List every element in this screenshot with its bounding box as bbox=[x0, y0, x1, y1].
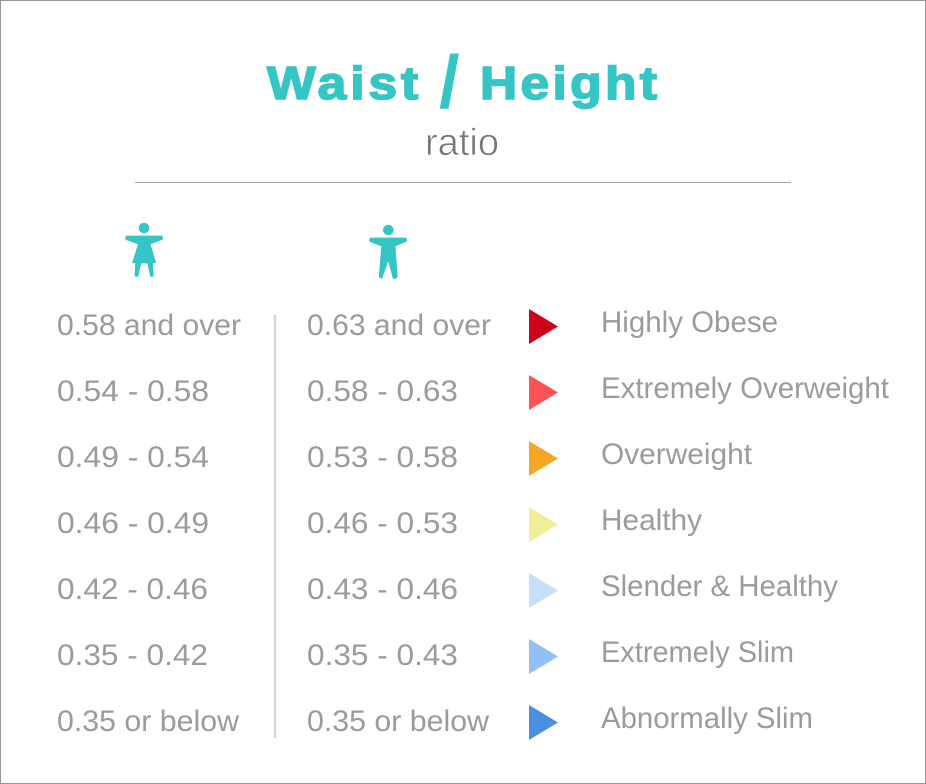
column: female ratios: 0.58 and over bbox=[57, 309, 241, 342]
category labels: Slender & Healthy bbox=[601, 570, 838, 603]
subtitle: ratio bbox=[425, 122, 499, 164]
column: male ratios: 0.43 - 0.46 bbox=[307, 573, 458, 606]
category labels bbox=[601, 306, 889, 735]
category labels: Healthy bbox=[601, 504, 702, 537]
category labels: Extremely Overweight bbox=[601, 372, 889, 405]
arrow: extremely overweight bbox=[529, 375, 558, 410]
column: male ratios: 0.35 or below bbox=[307, 705, 489, 738]
colour markers bbox=[529, 309, 558, 740]
column: male ratios bbox=[307, 309, 491, 738]
column: female ratios: 0.54 - 0.58 bbox=[57, 375, 209, 408]
column: female ratios: 0.35 or below bbox=[57, 705, 239, 738]
category labels: Overweight bbox=[601, 438, 752, 471]
arrow: extremely slim bbox=[529, 639, 558, 674]
title: Height bbox=[480, 58, 657, 109]
column: female ratios: 0.42 - 0.46 bbox=[57, 573, 208, 606]
arrow: healthy bbox=[529, 507, 558, 542]
column: male ratios: 0.58 - 0.63 bbox=[307, 375, 458, 408]
column: male ratios: 0.35 - 0.43 bbox=[307, 639, 458, 672]
column: female ratios bbox=[57, 309, 241, 738]
icon: male figure bbox=[370, 225, 406, 278]
column: male ratios: 0.46 - 0.53 bbox=[307, 507, 458, 540]
category labels: Extremely Slim bbox=[601, 636, 794, 669]
column: female ratios: 0.46 - 0.49 bbox=[57, 507, 209, 540]
arrow: abnormally slim bbox=[529, 705, 558, 740]
title: Waist bbox=[267, 58, 418, 109]
icon: female figure bbox=[126, 223, 162, 276]
title bbox=[267, 40, 657, 124]
column: male ratios: 0.63 and over bbox=[307, 309, 491, 342]
title: / bbox=[439, 40, 460, 124]
arrow: overweight bbox=[529, 441, 558, 476]
category labels: Highly Obese bbox=[601, 306, 778, 339]
arrow: highly obese bbox=[529, 309, 558, 344]
category labels: Abnormally Slim bbox=[601, 702, 813, 735]
column: female ratios: 0.35 - 0.42 bbox=[57, 639, 208, 672]
column: female ratios: 0.49 - 0.54 bbox=[57, 441, 209, 474]
column: male ratios: 0.53 - 0.58 bbox=[307, 441, 458, 474]
arrow: slender and healthy bbox=[529, 573, 558, 608]
